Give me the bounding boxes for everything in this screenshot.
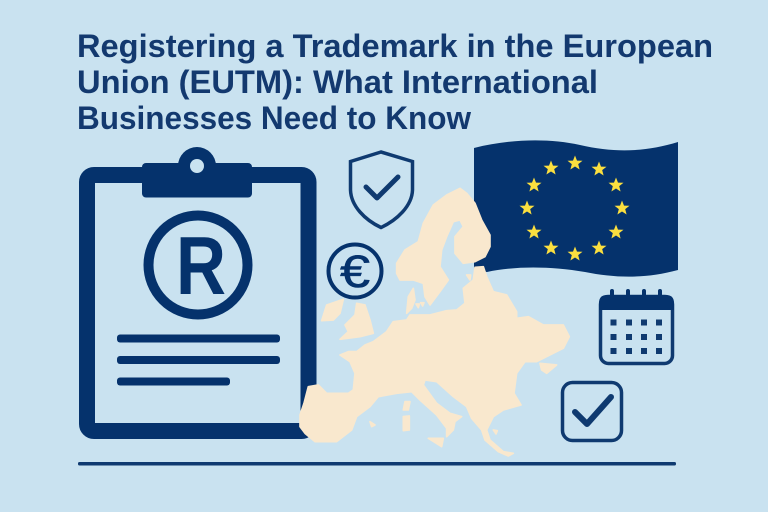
Denmark xyxy=(407,288,415,313)
title: Registering a Trademark in the European xyxy=(77,28,713,64)
icon: EU flag xyxy=(474,140,678,277)
Crimea xyxy=(540,363,557,373)
icon: clipboard with registered trademark xyxy=(87,147,308,431)
document text lines xyxy=(117,334,280,386)
Scandinavia and Finland xyxy=(397,188,490,305)
title: Union (EUTM): What International xyxy=(77,64,598,100)
title: Businesses Need to Know xyxy=(77,100,471,136)
Mediterranean and Baltic islands xyxy=(370,275,497,447)
icon: shield with checkmark xyxy=(350,152,412,228)
icon: checkbox xyxy=(562,382,622,440)
flag stars xyxy=(520,156,630,260)
title xyxy=(77,28,713,136)
map of Europe xyxy=(300,188,569,456)
icon: calendar xyxy=(599,291,674,364)
registered symbol: R xyxy=(176,219,226,312)
Great Britain xyxy=(340,303,373,339)
mainland xyxy=(300,267,569,456)
icon: euro coin xyxy=(328,244,382,298)
registered symbol xyxy=(148,216,248,314)
Ireland xyxy=(322,299,343,321)
icon: euro coin: € xyxy=(340,246,370,297)
baseline rule xyxy=(78,462,676,466)
